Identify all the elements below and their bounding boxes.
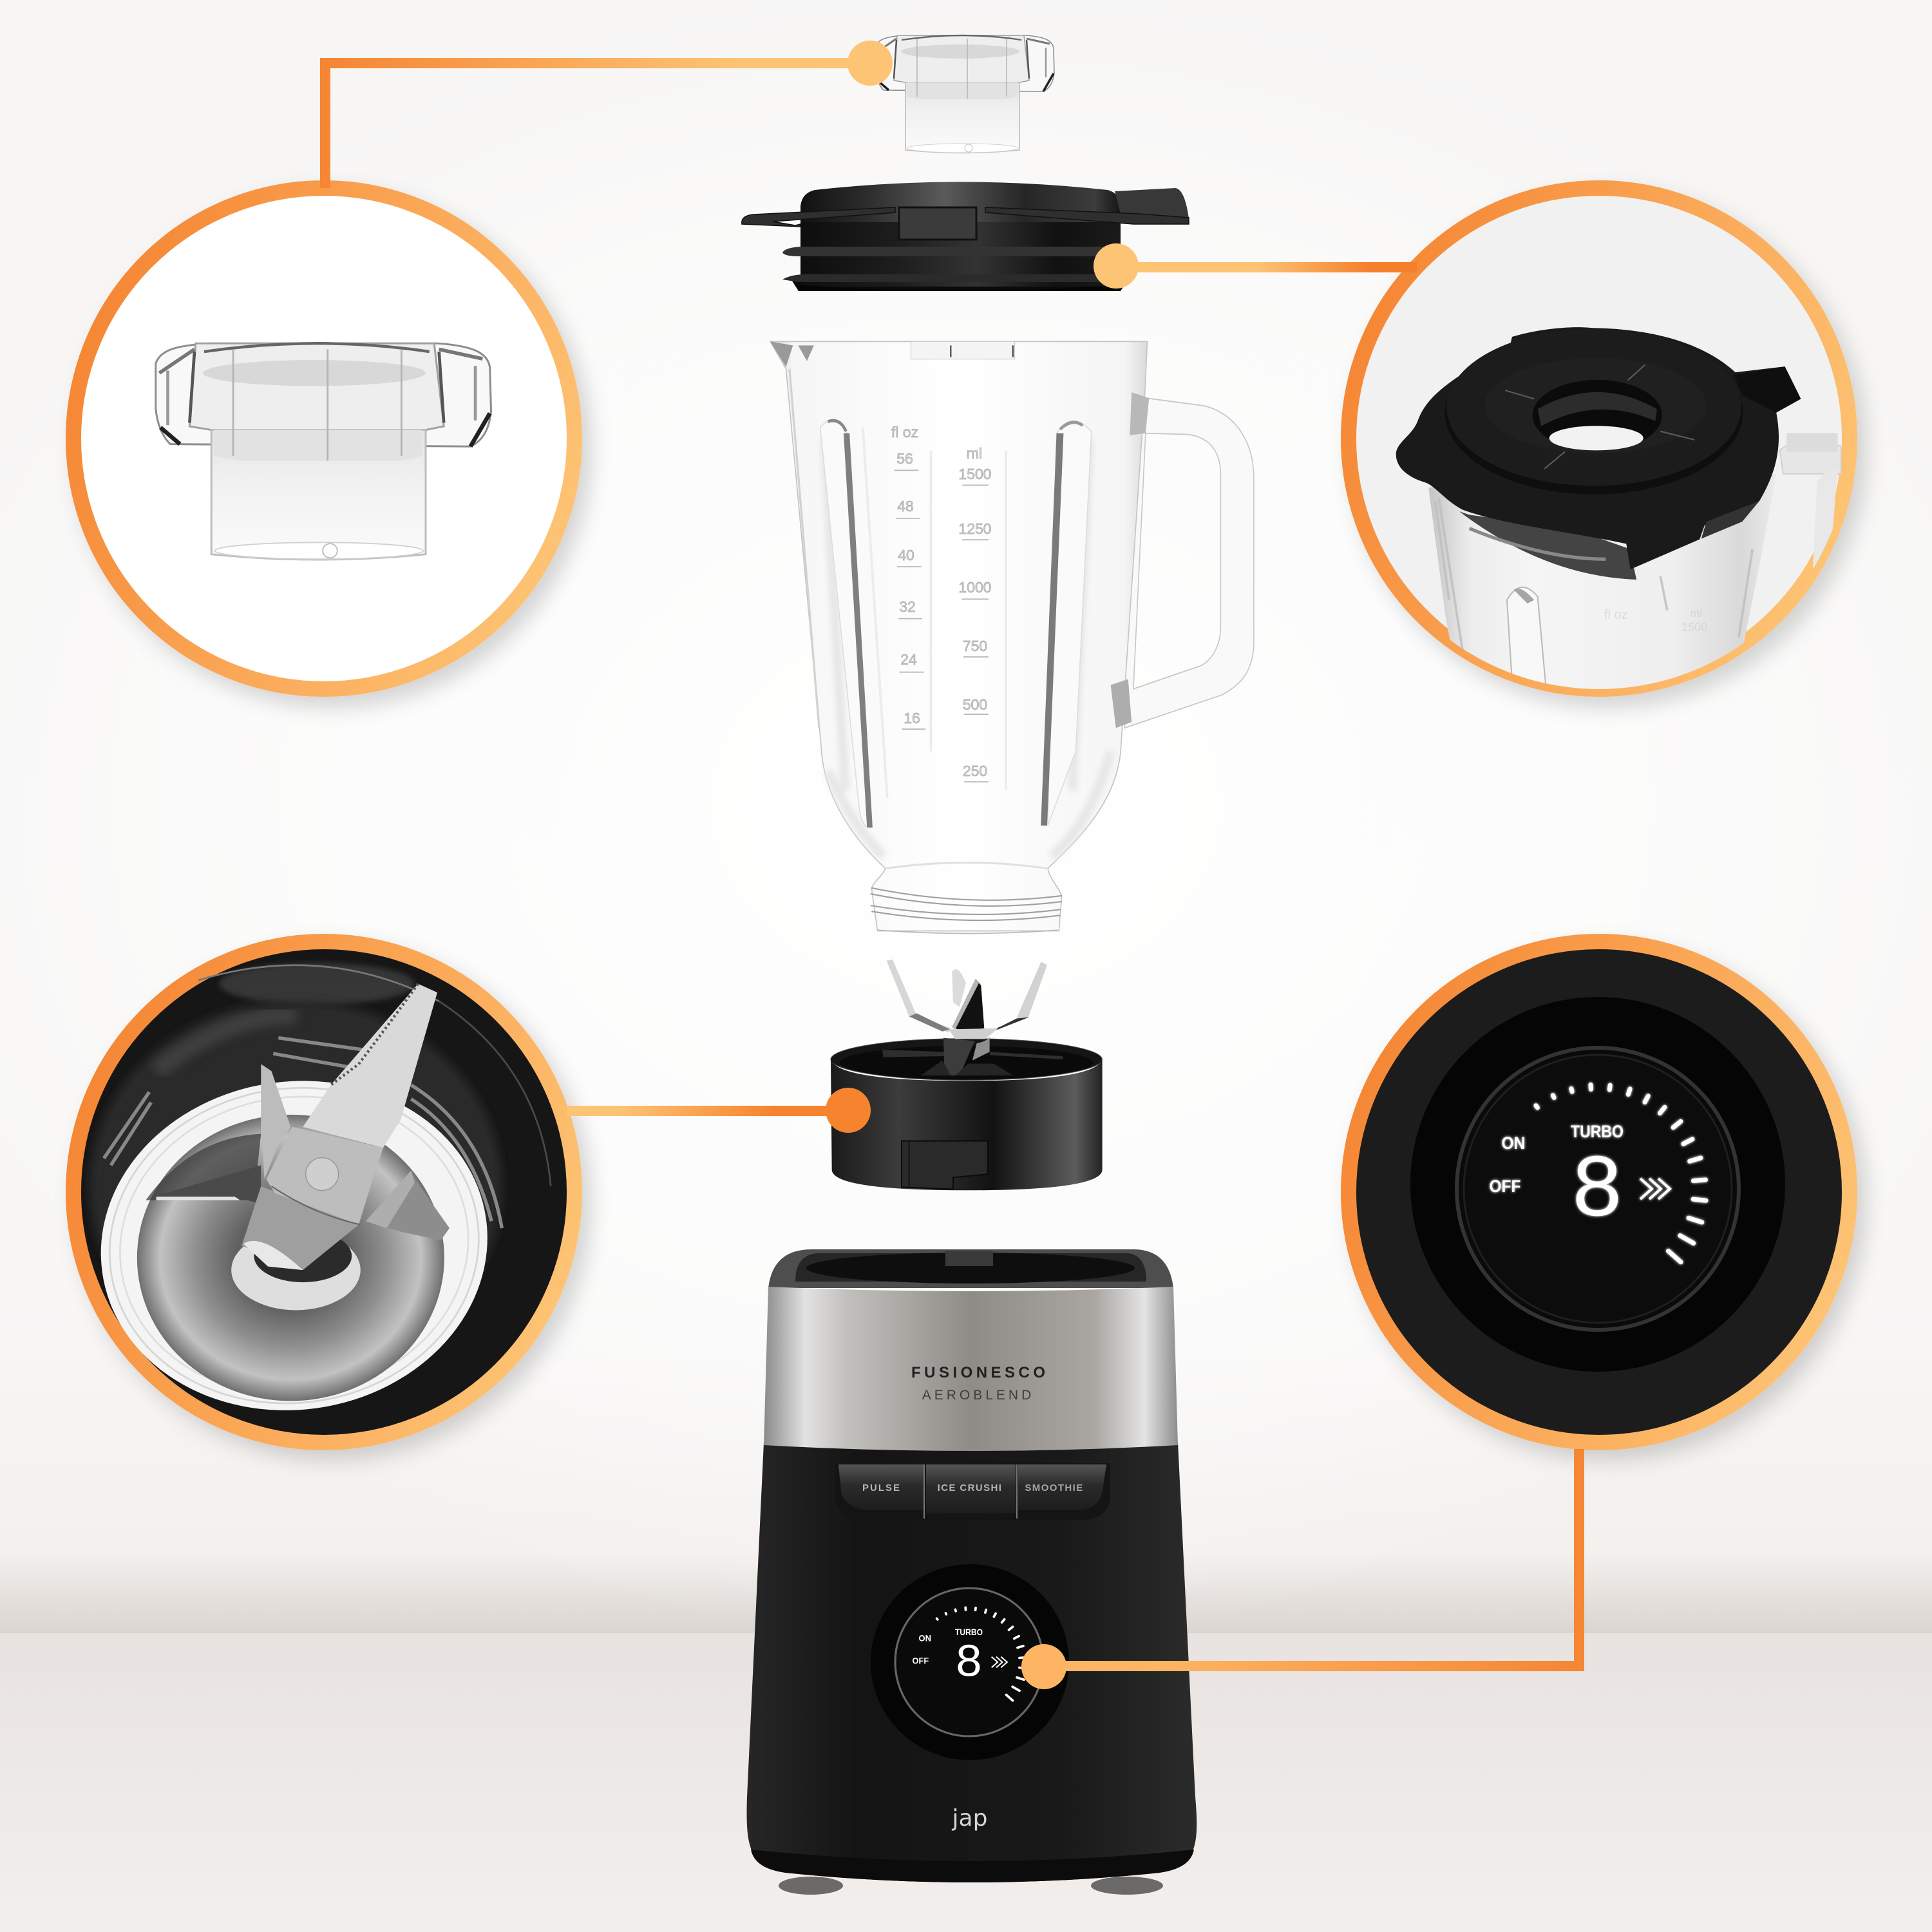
LED labels: 8 bbox=[955, 1638, 983, 1690]
jar measurement markings bbox=[891, 424, 992, 779]
control dial on body bbox=[895, 1588, 1043, 1736]
jar measurement markings: fl oz bbox=[891, 424, 918, 440]
enlarged stainless blades and gasket bbox=[79, 963, 551, 1435]
jar measurement markings: 32 bbox=[899, 598, 916, 615]
connector: blades to detail bbox=[567, 1088, 871, 1133]
brand name: FUSIONESCO bbox=[911, 1364, 1045, 1381]
connector: dial to detail bbox=[1021, 1449, 1579, 1689]
function buttons: ICE CRUSHI bbox=[938, 1482, 1002, 1493]
enlarged lid on glass jar bbox=[1396, 327, 1841, 708]
blades bbox=[887, 960, 951, 1032]
callout dot bbox=[826, 1088, 871, 1133]
LED labels: ON bbox=[1502, 1133, 1525, 1153]
jar measurement markings: 1500 bbox=[958, 466, 992, 482]
jar measurement markings: 40 bbox=[898, 547, 914, 564]
function buttons: SMOOTHIE bbox=[1025, 1482, 1084, 1493]
jar body bbox=[770, 341, 1148, 931]
LED labels: OFF bbox=[1489, 1177, 1521, 1196]
black base body bbox=[747, 1443, 1197, 1882]
enlarged lid on glass jar: ml bbox=[1690, 607, 1702, 620]
dial recess on body bbox=[871, 1564, 1069, 1760]
glass jar bbox=[770, 341, 1254, 933]
cup body bbox=[831, 1058, 1103, 1190]
LED labels: TURBO bbox=[955, 1627, 983, 1638]
icon: turbo chevrons bbox=[1640, 1179, 1670, 1199]
blade assembly bbox=[831, 960, 1103, 1190]
callout dot bbox=[1021, 1644, 1066, 1689]
panel: blade assembly detail circle bbox=[73, 942, 574, 1443]
enlarged lid on glass jar: 1500 bbox=[1681, 620, 1707, 633]
icon: turbo chevrons bbox=[992, 1657, 1007, 1667]
LED labels: OFF bbox=[913, 1656, 929, 1667]
enlarged control dial bbox=[1457, 1048, 1739, 1330]
panel: lid detail circle bbox=[1349, 188, 1850, 708]
jar measurement markings: 16 bbox=[904, 710, 920, 726]
jar measurement markings: 1000 bbox=[958, 579, 992, 596]
icon: enlarged measuring cap bbox=[156, 343, 491, 560]
LED labels bbox=[913, 1627, 983, 1690]
connector: lid to detail bbox=[1094, 243, 1417, 289]
LED speed ticks bbox=[1536, 1084, 1706, 1262]
jar measurement markings: ml bbox=[967, 445, 982, 462]
jar measurement markings: 1250 bbox=[958, 520, 992, 537]
panel: control dial detail circle bbox=[1349, 942, 1850, 1443]
jar neck threads bbox=[871, 888, 1062, 920]
function buttons: PULSE bbox=[862, 1482, 901, 1493]
LED labels: 8 bbox=[1571, 1142, 1624, 1242]
LED speed ticks bbox=[937, 1607, 1026, 1701]
measuring cap bbox=[876, 35, 1054, 153]
LED labels bbox=[1489, 1122, 1624, 1242]
callout dot bbox=[848, 41, 893, 86]
jar measurement markings: 250 bbox=[963, 762, 987, 779]
panel: measuring cap detail circle bbox=[73, 188, 574, 689]
top bezel bbox=[768, 1249, 1173, 1288]
model name: AEROBLEND bbox=[922, 1388, 1034, 1403]
LED labels: ON bbox=[919, 1633, 931, 1643]
silver band bbox=[764, 1287, 1178, 1451]
black jar lid bbox=[742, 182, 1189, 291]
jar handle bbox=[1124, 396, 1254, 728]
callout dot bbox=[1094, 243, 1139, 289]
cup back rim bbox=[831, 1039, 1102, 1080]
cup notch bbox=[902, 1141, 988, 1189]
base feet bbox=[779, 1877, 1163, 1895]
logo: jap bbox=[952, 1805, 987, 1832]
jar measurement markings: 500 bbox=[963, 696, 987, 713]
dial recess bbox=[1410, 997, 1785, 1372]
enlarged lid on glass jar: fl oz bbox=[1604, 608, 1628, 622]
jar measurement markings: 750 bbox=[963, 638, 987, 654]
LED labels: TURBO bbox=[1571, 1122, 1624, 1141]
connector: measuring cap to detail bbox=[325, 41, 893, 188]
motor base bbox=[747, 1249, 1197, 1895]
jar measurement markings: 56 bbox=[896, 450, 913, 467]
jar measurement markings: 24 bbox=[900, 651, 917, 668]
jar measurement markings: 48 bbox=[897, 498, 914, 515]
function buttons bbox=[835, 1463, 1110, 1520]
